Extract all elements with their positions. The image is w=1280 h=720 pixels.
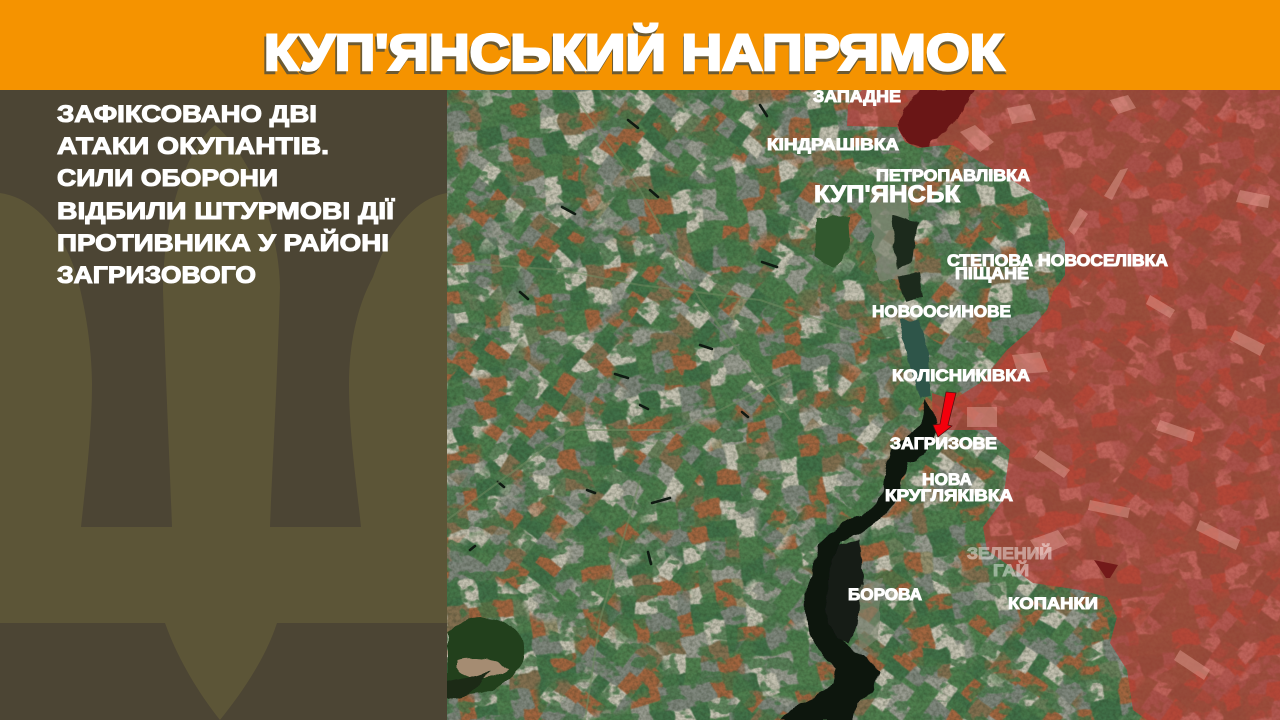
settlement labels: КУП'ЯНСЬК — [814, 181, 960, 208]
gullies and ponds — [470, 105, 777, 564]
settlement labels: ЗАПАДНЕ — [813, 88, 901, 106]
roads — [447, 90, 880, 720]
description text: ЗАГРИЗОВОГО — [57, 262, 256, 289]
settlement labels: ГАЙ — [993, 561, 1029, 580]
arrow: attack direction — [933, 392, 956, 437]
left text panel — [0, 90, 447, 720]
forests and settlements — [447, 190, 930, 700]
description text: СИЛИ ОБОРОНИ — [57, 165, 278, 192]
title: КУП'ЯНСЬКИЙ НАПРЯМОК — [262, 26, 1005, 84]
trident emblem — [0, 125, 447, 720]
settlement labels: КІНДРАШІВКА — [767, 136, 899, 154]
settlement labels: КРУГЛЯКІВКА — [885, 487, 1013, 505]
satellite map — [420, 60, 1280, 720]
occupied territory overlay — [840, 90, 1280, 720]
settlement labels: НОВОСЕЛІВКА — [1038, 252, 1168, 270]
pale fields in occupied area — [960, 95, 1270, 680]
description text: ПРОТИВНИКА У РАЙОНІ — [57, 229, 389, 257]
settlement labels: НОВООСИНОВЕ — [872, 303, 1011, 321]
title: КУП'ЯНСЬКИЙ НАПРЯМОК — [264, 23, 1005, 81]
settlement labels: ПЕТРОПАВЛІВКА — [876, 167, 1030, 185]
settlement labels — [767, 88, 1168, 613]
description text — [57, 101, 395, 289]
description text: АТАКИ ОКУПАНТІВ. — [57, 133, 329, 160]
settlement labels: СТЕПОВА — [947, 252, 1033, 270]
settlement labels: ПІЩАНЕ — [955, 265, 1029, 283]
settlement labels: БОРОВА — [848, 586, 922, 604]
reservoir — [780, 400, 936, 720]
description text: ВІДБИЛИ ШТУРМОВІ ДІЇ — [57, 198, 395, 225]
header bar — [0, 0, 1280, 90]
description text: ЗАФІКСОВАНО ДВІ — [57, 101, 317, 128]
settlement labels: ЗАГРИЗОВЕ — [890, 435, 997, 453]
settlement labels: КОЛІСНИКІВКА — [892, 367, 1030, 385]
settlement labels: КОПАНКИ — [1008, 595, 1098, 613]
settlement labels: ЗЕЛЕНИЙ — [967, 544, 1052, 563]
dark forest in occupied area — [897, 90, 975, 148]
settlement labels: НОВА — [922, 471, 972, 489]
